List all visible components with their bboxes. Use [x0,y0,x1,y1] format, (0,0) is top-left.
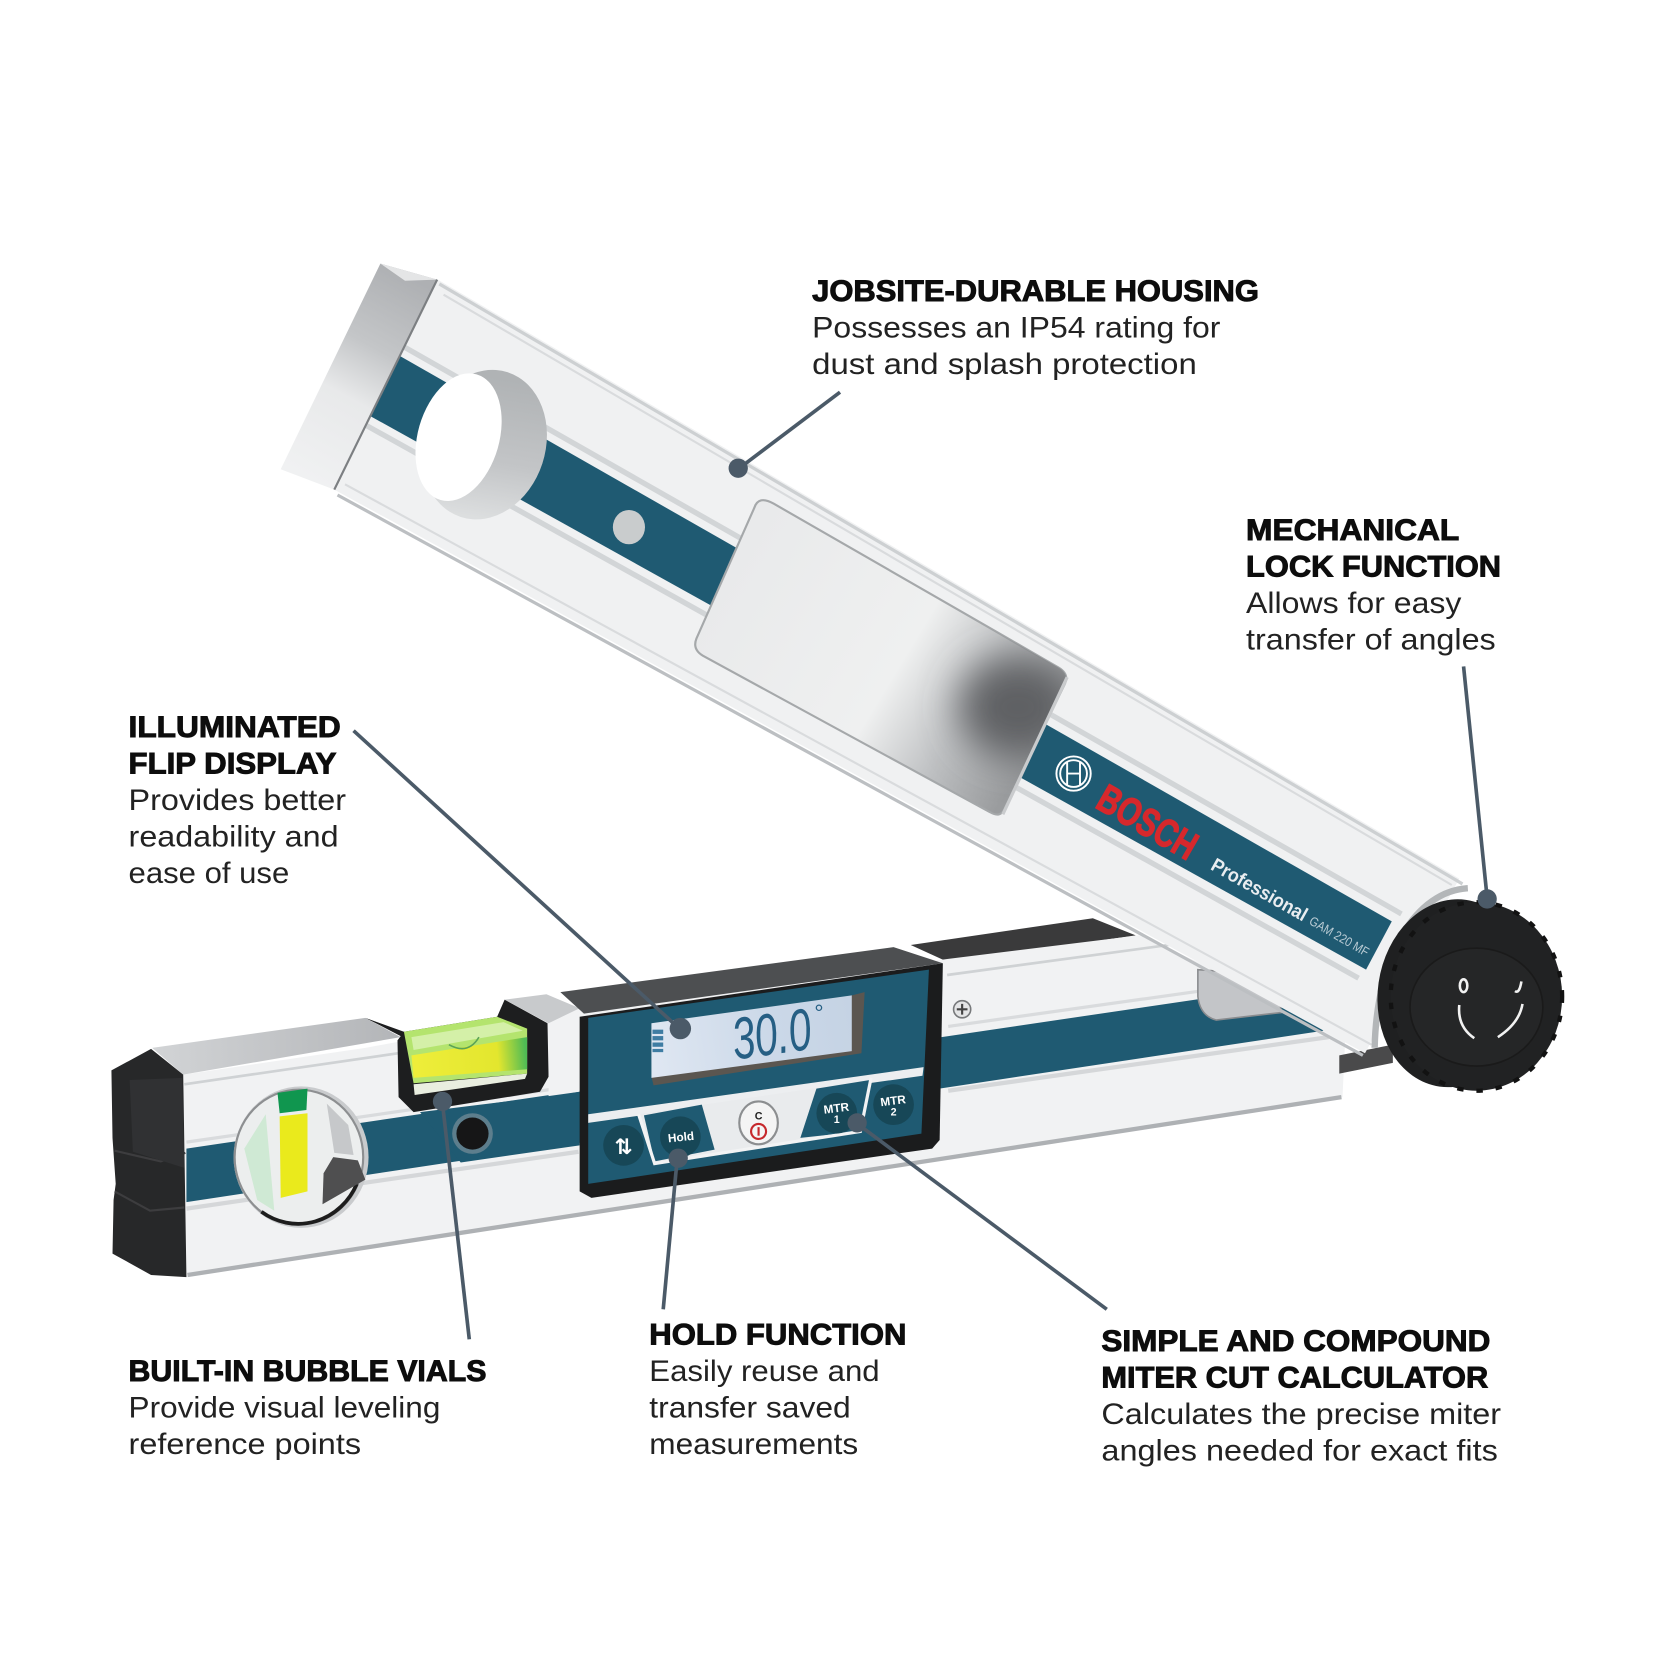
description: Provides better [129,784,346,817]
screw [954,1001,971,1018]
description [129,1392,440,1461]
heading: HOLD FUNCTION [649,1319,906,1352]
power button: C [755,1111,763,1123]
leader dot [848,1113,867,1132]
description: readability and [129,820,339,853]
description: Possesses an IP54 rating for [812,312,1220,345]
upper arm ridges [338,284,1462,1055]
description: reference points [129,1428,361,1461]
MTR 2 button [873,1084,914,1125]
description: dust and splash protection [812,348,1197,381]
heading: MECHANICAL [1246,514,1459,547]
description: Allows for easy [1246,587,1461,620]
heading: ILLUMINATED [129,711,341,744]
callout: miter cut calculator [848,1113,1501,1467]
lower arm body [183,935,1346,1277]
heading [1246,514,1501,583]
leader dot [1478,889,1497,909]
upper arm teal strip [370,355,1392,970]
Bosch wordmark: BOSCH [1089,776,1205,869]
leader line [1464,666,1487,898]
product: digital angle finder [111,264,1562,1277]
panel divider lines [639,1078,871,1164]
description: Calculates the precise miter [1101,1398,1501,1431]
heading: SIMPLE AND COMPOUND [1101,1325,1490,1358]
heading: BUILT-IN BUBBLE VIALS [129,1355,486,1388]
callout: illuminated flip display [129,711,691,1039]
description: angles needed for exact fits [1101,1434,1498,1467]
strip and edge ridges [184,941,1341,1275]
leader dot [729,459,748,478]
model label: GAM 220 MF [1307,913,1372,959]
infographic canvas [111,264,1564,1466]
hold button: Hold [667,1130,695,1145]
upper arm body [334,279,1459,1053]
degree sign: ° [814,1000,824,1026]
hold panel [644,1105,715,1161]
description [649,1355,880,1461]
heading [129,711,341,781]
callout: mechanical lock function [1246,514,1501,909]
description: transfer of angles [1246,623,1496,656]
description [1246,587,1496,656]
pivot shadow [1339,1045,1393,1074]
leader line [856,1123,1107,1309]
description [129,784,346,890]
black end cap [111,1049,186,1277]
leader line [663,1159,677,1309]
arrows button: ⇅ [615,1135,633,1160]
dark rear edge of lower arm [911,918,1136,962]
callout: built-in bubble vials [129,1092,486,1461]
silver section beside vial [420,994,580,1162]
Bosch logo mark [1056,756,1091,791]
hold button [660,1116,701,1157]
knob grip [1391,902,1562,1091]
MTR 1 button: 1 [834,1114,840,1126]
top bubble vial [365,1000,549,1112]
battery icon [652,1030,663,1052]
knob side [1365,889,1540,1097]
LCD shadow [651,992,865,1085]
knob base [1391,902,1562,1091]
end cap [281,264,437,490]
sliding plate [695,500,1077,815]
MTR 2 button: MTR [880,1093,907,1109]
callout: jobsite-durable housing [729,275,1259,478]
LCD screen [651,995,852,1078]
LCD reading: 30.0 [728,997,815,1073]
heading: FLIP DISPLAY [129,748,336,781]
screw hole [452,1113,493,1154]
heading: LOCK FUNCTION [1246,550,1501,583]
display lid [560,947,943,1014]
display frame [580,963,943,1198]
knob markings [1459,979,1522,1038]
description: Provide visual leveling [129,1392,440,1425]
leader line [442,1104,469,1339]
button band [588,1067,924,1123]
leader dot [433,1092,452,1111]
heading: JOBSITE-DURABLE HOUSING [812,275,1259,308]
leader line [354,731,679,1029]
description: measurements [649,1428,858,1461]
leader dot [669,1149,688,1168]
Professional label: Professional [1207,855,1311,926]
rear notch [1198,970,1281,1020]
description: Easily reuse and [649,1355,880,1388]
callout: hold function [649,1149,906,1461]
power button [739,1101,778,1144]
display module [560,947,943,1198]
lower arm teal strip [186,982,1323,1202]
round bubble vial [234,1086,369,1228]
lower arm [111,918,1393,1277]
strip rivet [613,510,645,544]
description: ease of use [129,857,289,890]
lower arm top face [152,1018,401,1075]
locking knob [1365,888,1562,1097]
leader line [739,392,840,468]
MTR 2 button: 2 [891,1106,897,1118]
display teal panel [588,970,929,1184]
MTR 1 button: MTR [823,1101,850,1117]
knob face [1410,948,1543,1066]
description [1101,1398,1501,1467]
upper arm [281,264,1462,1055]
leader dot [670,1018,691,1039]
MTR panel [800,1080,870,1138]
heading [1101,1325,1490,1395]
heading: MITER CUT CALCULATOR [1101,1362,1489,1395]
description [812,312,1220,381]
round cut-out [401,353,566,536]
metal collar [1375,888,1468,1048]
arrows button [603,1125,644,1166]
MTR 1 button [816,1093,857,1134]
description: transfer saved [649,1392,851,1425]
